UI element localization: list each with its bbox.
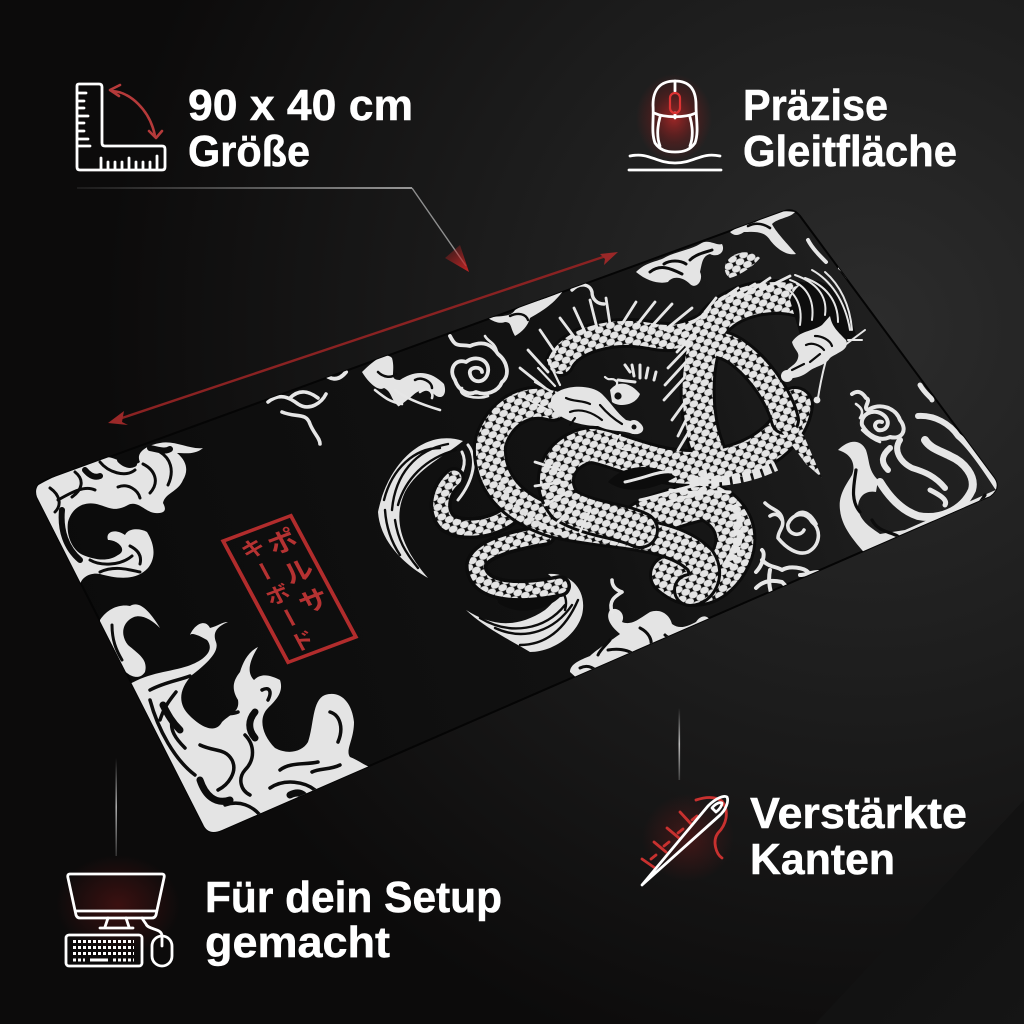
- flame: top left corner: [30, 442, 203, 590]
- dragon tail fin left: [378, 438, 473, 578]
- flames: top edge: [636, 211, 852, 286]
- stamp: red logo box: ポルサ: [258, 525, 336, 624]
- heading: glide: [743, 81, 957, 176]
- cloud lower right: [754, 548, 820, 592]
- heading: setup: Für dein Setup: [205, 873, 502, 922]
- dragon rear fin marks: [618, 365, 730, 505]
- vertical leader left: [116, 758, 117, 856]
- dragon tail fin bottom: [466, 574, 583, 652]
- dragon dorsal spines: [520, 276, 790, 532]
- dragon head right: [775, 270, 865, 403]
- dragon head left: [520, 360, 643, 450]
- flame: right corner: [838, 416, 1000, 565]
- heading: size: [188, 81, 413, 176]
- heading: size: Größe: [188, 127, 310, 176]
- icon: mouse on surface: [629, 74, 721, 170]
- heading: edges: [750, 789, 967, 884]
- flame: left hook: [100, 604, 160, 677]
- heading: glide: Präzise: [743, 81, 888, 130]
- flame clouds: upper row left: [268, 356, 445, 444]
- flame: bottom left wave: [132, 622, 368, 832]
- dragon tail tip right: [782, 426, 822, 478]
- dragon body coils: [441, 297, 800, 591]
- cloud lower centre right: [765, 503, 818, 553]
- cloud swirl upper left: [450, 336, 507, 398]
- stamp: red logo box: キーボード: [233, 535, 320, 660]
- stamp: red logo box: [223, 516, 356, 662]
- mat surface: [36, 210, 997, 832]
- heading: glide: Gleitfläche: [743, 127, 957, 176]
- heading: setup: [205, 873, 502, 967]
- dragon: [378, 270, 865, 652]
- belly plates: [727, 505, 739, 565]
- leader line to mat from size label: [77, 188, 469, 272]
- icon: computer setup: [56, 855, 180, 966]
- icon: needle and stitches: [642, 794, 734, 885]
- black lens between coils: [608, 467, 676, 490]
- cloud swirl right: [852, 392, 904, 442]
- artwork clipped to mat: [30, 211, 1000, 850]
- heading: edges: Verstärkte: [750, 789, 967, 838]
- small marks right edge: [920, 385, 932, 400]
- heading: setup: gemacht: [205, 918, 390, 967]
- panel: mousepad: [30, 210, 1000, 850]
- dragon pearl: [605, 377, 640, 405]
- heading: size: 90 x 40 cm: [188, 81, 413, 130]
- icon: ruler: [77, 84, 165, 170]
- vertical leader right: [678, 708, 680, 780]
- heading: edges: Kanten: [750, 835, 895, 884]
- cloud flame upper mid: [488, 285, 604, 336]
- flames: bottom edge centre: [570, 578, 709, 676]
- dimension arrow along mat edge: [108, 252, 618, 425]
